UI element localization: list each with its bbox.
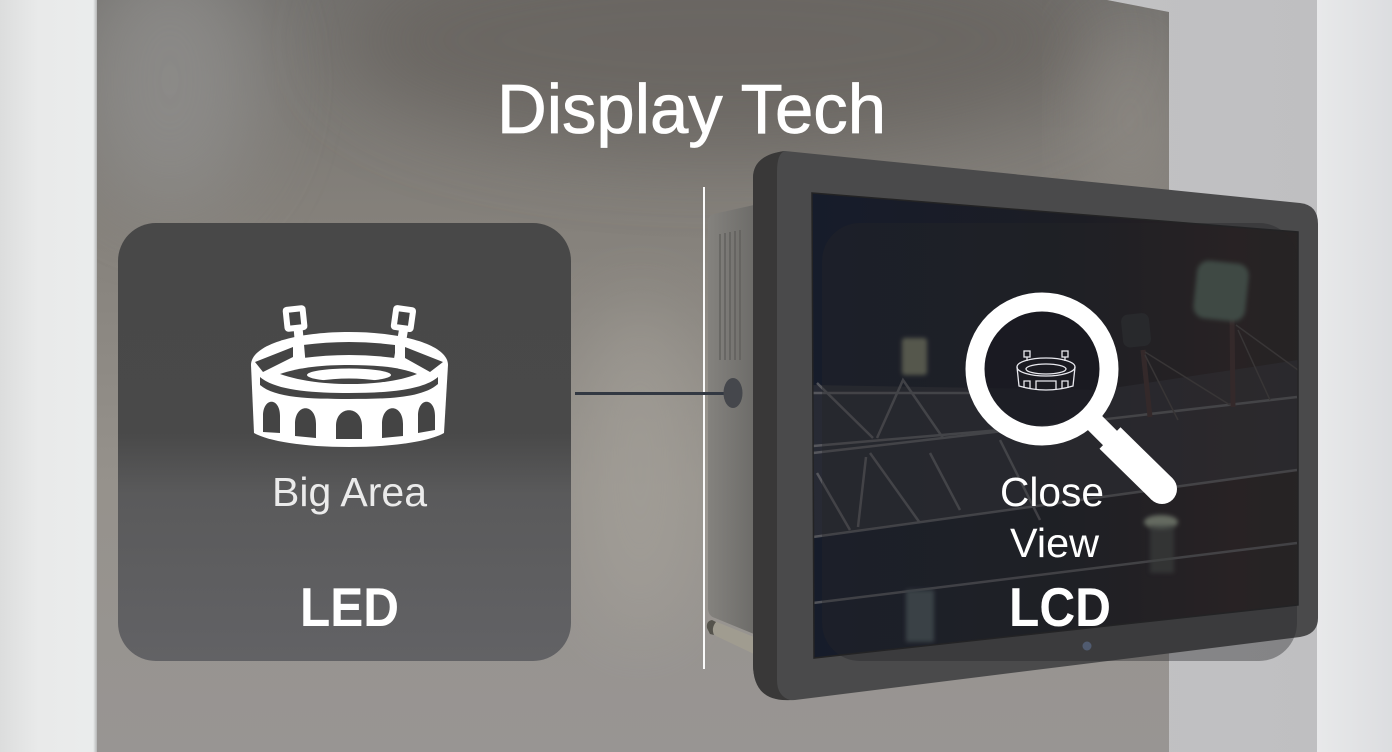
screen (800, 190, 1310, 670)
back box (708, 205, 754, 634)
LED card background (118, 223, 571, 661)
label: Close View: View (1010, 520, 1099, 566)
vent slats (720, 230, 740, 360)
connector knob (724, 378, 742, 408)
title: Display Tech (497, 70, 886, 148)
mounting pipe (707, 620, 754, 654)
label: LED: LED (300, 576, 399, 638)
label: Big Area: Big Area (272, 469, 427, 515)
monitor (707, 151, 1318, 700)
stadium roof and truss lines (813, 380, 1297, 603)
status light (1082, 642, 1092, 650)
bezel side (753, 151, 790, 700)
icon: small stadium (1017, 351, 1075, 390)
stand band (812, 360, 1298, 537)
label: Close View (1000, 469, 1104, 566)
connector line (575, 378, 742, 408)
panel: LED (118, 223, 571, 661)
panel: LCD (822, 223, 1297, 661)
floodlight cluster (902, 259, 1250, 642)
LCD card background (822, 223, 1297, 661)
label: Close View: Close (1000, 469, 1104, 515)
screen edge (812, 193, 1298, 658)
divider line (703, 187, 705, 669)
icon: magnifying glass (975, 302, 1177, 504)
bezel front (753, 151, 1318, 700)
label: LCD: LCD (1009, 576, 1111, 638)
icon: stadium (251, 308, 448, 447)
